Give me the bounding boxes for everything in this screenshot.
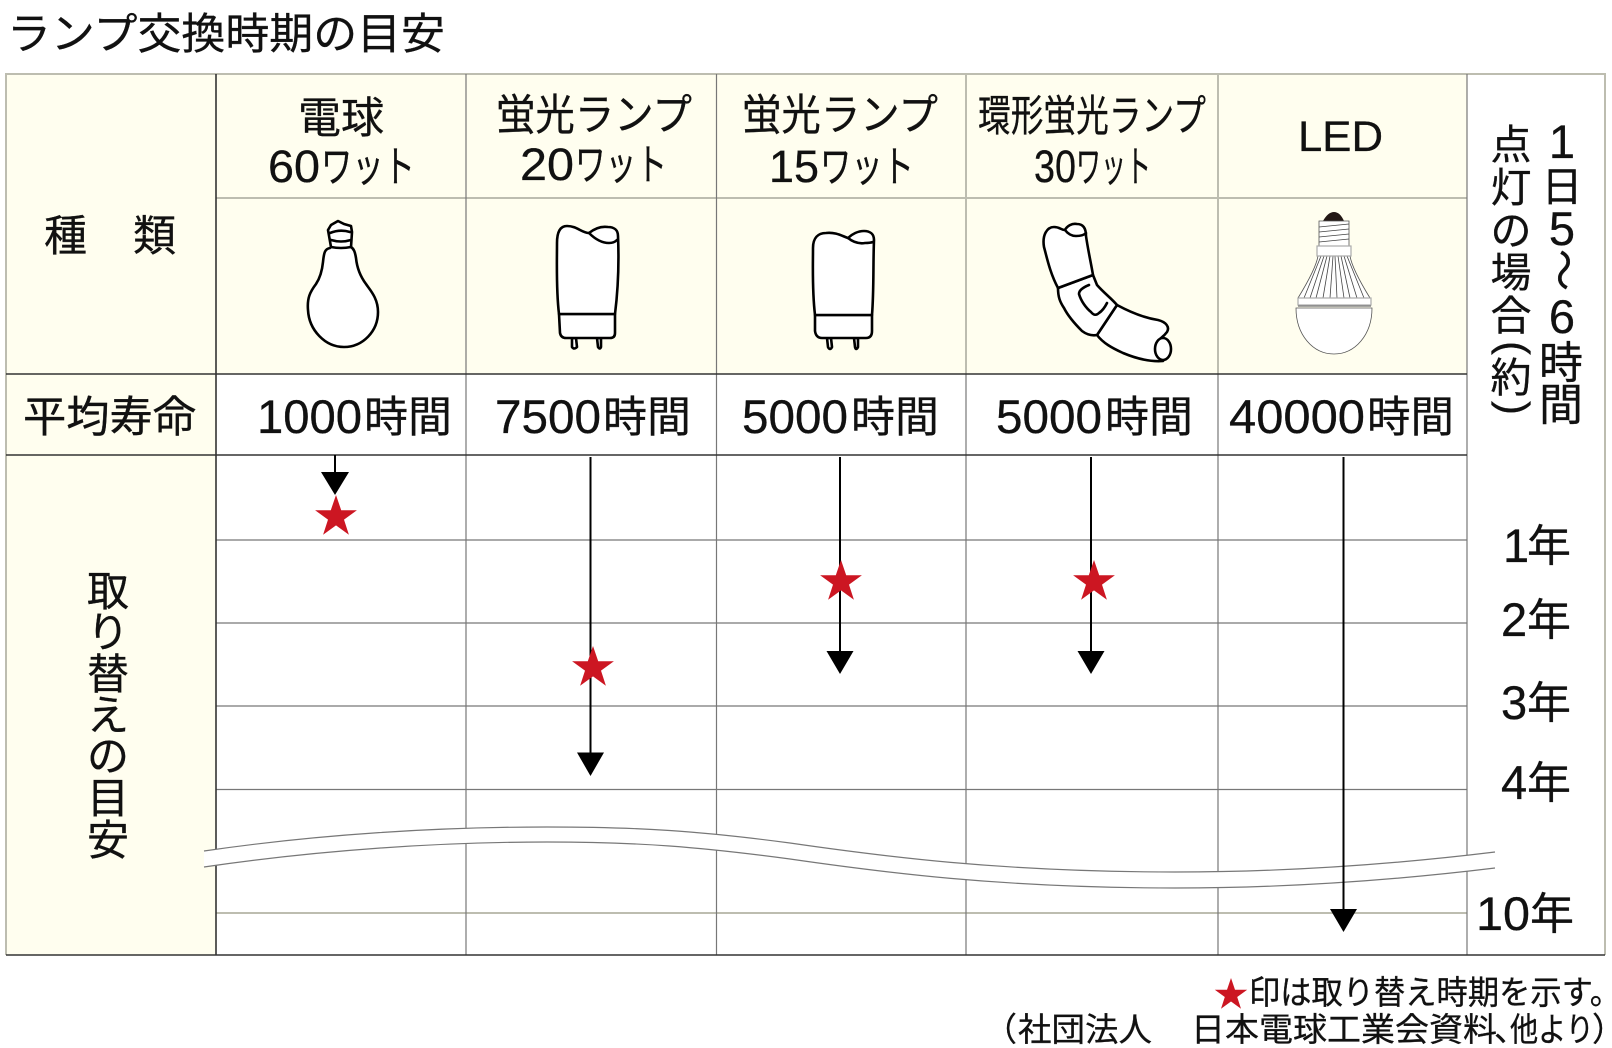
icon: circular fluorescent lamp (1044, 224, 1171, 361)
year label: 2年: 2 (1501, 593, 1527, 646)
year label: 10年: 10 (1476, 887, 1530, 940)
value: 5000時間: 時間 (851, 394, 939, 442)
value: 5000時間 (環形): 時間 (1105, 394, 1193, 442)
star marker: 環形蛍光ランプ (1073, 560, 1115, 600)
vertical label: 1日5〜6時間 (1539, 115, 1586, 430)
vertical label: 点灯の場合(約): 合 (1490, 293, 1532, 339)
heading: 環形蛍光ランプ 30ワット: ワット (1076, 144, 1151, 192)
arrow: LED (1330, 457, 1357, 932)
arrow: 電球 (321, 455, 349, 495)
arrow: 蛍光ランプ 20W (577, 457, 604, 776)
heading: 種類 (44, 213, 176, 261)
source note: 社団法人 (1018, 1011, 1152, 1048)
value: 1000時間 (257, 390, 452, 443)
year label: 2年 (1501, 593, 1571, 646)
vertical label: 1日5〜6時間: 1 (1549, 115, 1575, 168)
value: 5000時間 (742, 390, 939, 443)
source note: 他より (1510, 1011, 1594, 1048)
heading: 電球 60ワット: 60 (268, 141, 320, 192)
value: 7500時間: 時間 (603, 394, 691, 442)
value: 5000時間: 5000 (742, 390, 848, 443)
source note: 日本電球工業会資料 (1191, 1011, 1497, 1048)
value: 7500時間 (495, 390, 691, 443)
heading: 蛍光ランプ 15ワット: 15 (769, 141, 819, 192)
title: ランプ交換時期の目安 (7, 11, 445, 59)
vertical label: 点灯の場合(約): 場 (1490, 250, 1532, 296)
year label: 1年 (1503, 519, 1571, 572)
value: 1000時間: 時間 (364, 394, 452, 442)
source note: 、 (1494, 1011, 1527, 1048)
vertical label: 1日5〜6時間: 間 (1539, 381, 1583, 430)
value: 40000時間: 40000 (1229, 390, 1365, 443)
heading: 蛍光ランプ 20ワット: ワット (575, 142, 667, 190)
vertical label: 1日5〜6時間: 日 (1542, 164, 1582, 210)
axis break band (204, 827, 1495, 888)
heading: 種類: 種 (44, 213, 87, 261)
year label: 3年: 3 (1501, 676, 1527, 729)
heading: 蛍光ランプ 20ワット (496, 92, 692, 190)
vertical label: 1日5〜6時間: 6 (1549, 290, 1575, 343)
star marker: 蛍光ランプ 20W (572, 646, 614, 686)
heading: 環形蛍光ランプ 30ワット: 30 (1034, 141, 1076, 192)
heading: 環形蛍光ランプ 30ワット: 環形蛍光ランプ (978, 93, 1206, 141)
year label: 4年: 年 (1527, 759, 1571, 808)
arrow: 蛍光ランプ 15W (826, 457, 854, 674)
year label: 1年: 1 (1503, 519, 1529, 572)
vertical label: 点灯の場合(約): ) (1491, 401, 1538, 415)
icon: incandescent bulb (308, 221, 378, 347)
year label: 1年: 年 (1527, 522, 1571, 571)
value: 7500時間: 7500 (495, 390, 601, 443)
icon: LED bulb (1296, 212, 1372, 354)
year label: 10年: 年 (1530, 890, 1574, 939)
source note: （ (984, 1011, 1017, 1048)
icon: compact fluorescent lamp 15W (813, 231, 874, 349)
source note (984, 1011, 1612, 1048)
vertical label: 点灯の場合(約): 点 (1490, 122, 1532, 168)
value: 1000時間: 1000 (257, 390, 362, 443)
year label: 2年: 年 (1527, 596, 1571, 645)
value: 40000時間: 時間 (1367, 394, 1454, 442)
vertical label: 点灯の場合(約): 灯 (1490, 165, 1532, 211)
year label: 4年 (1501, 756, 1571, 809)
heading: 電球 60ワット: ワット (321, 144, 415, 192)
vertical label: 取り替えの目安: 取り替えの目安 (87, 568, 129, 864)
heading: 種類: 類 (133, 213, 176, 261)
heading: LED: LED (1298, 113, 1383, 161)
value: 40000時間 (1229, 390, 1454, 443)
vertical label: 1日5〜6時間: 〜 (1539, 249, 1586, 291)
heading: 蛍光ランプ 20ワット: 蛍光ランプ (496, 92, 692, 140)
icon: compact fluorescent lamp 20W (557, 226, 618, 348)
year label: 10年 (1476, 887, 1574, 940)
vertical label: 1日5〜6時間: 時 (1539, 339, 1583, 388)
star marker: 電球 (315, 495, 357, 535)
vertical label: 点灯の場合(約): ( (1491, 341, 1538, 355)
vertical label: 点灯の場合(約): 約 (1490, 355, 1532, 401)
heading: 環形蛍光ランプ 30ワット (978, 93, 1206, 192)
value: 5000時間 (環形) (996, 390, 1193, 443)
heading: 蛍光ランプ 15ワット: 蛍光ランプ (742, 92, 938, 140)
star marker: 蛍光ランプ 15W (820, 560, 862, 600)
heading: 蛍光ランプ 15ワット: ワット (820, 144, 914, 192)
row label: 平均寿命: 平均寿命 (23, 394, 196, 442)
year label: 3年 (1501, 676, 1571, 729)
arrow: 環形蛍光ランプ (1078, 457, 1104, 674)
vertical label: 点灯の場合(約) (1490, 122, 1538, 415)
heading: 電球 60ワット (268, 95, 415, 192)
year label: 3年: 年 (1527, 679, 1571, 728)
heading: 蛍光ランプ 15ワット (742, 92, 938, 192)
year label: 4年: 4 (1501, 756, 1527, 809)
heading: 蛍光ランプ 20ワット: 20 (520, 139, 574, 190)
heading: 電球 60ワット: 電球 (298, 95, 384, 143)
value: 5000時間 (環形): 5000 (996, 390, 1102, 443)
vertical label: 1日5〜6時間: 5 (1549, 202, 1575, 255)
vertical label: 点灯の場合(約): の (1490, 208, 1532, 254)
